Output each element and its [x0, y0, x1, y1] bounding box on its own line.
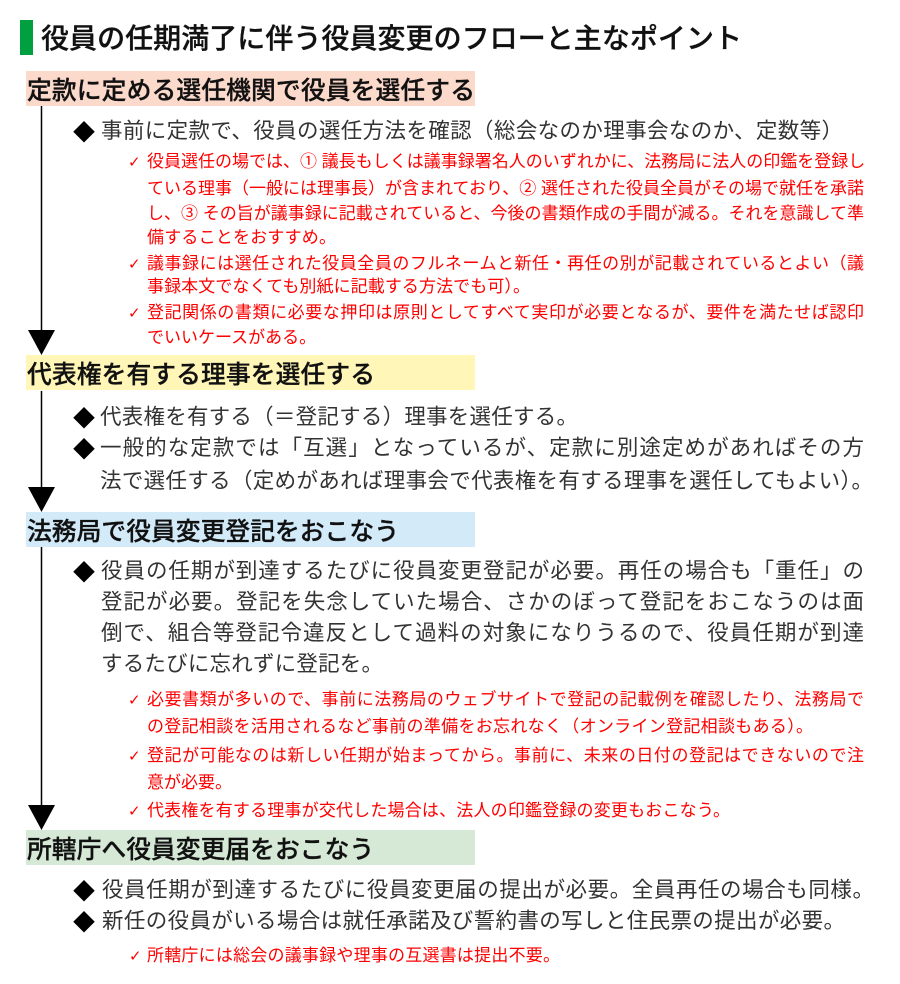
text block: step 4 points: 新任の役員がいる場合は就任承諾及び誓約書の写しと住民票の提出が必要。: [102, 909, 845, 933]
notes: step 1 red details: ✓: [128, 304, 141, 322]
notes: step 1 red details: 議事録には選任された役員全員のフルネームと新任・再任の別が記載されているとよい（議: [147, 254, 864, 272]
notes: step 3 red details: の登記相談を活用されるなど事前の準備をお忘れなく（オンライン登記相談もある）。: [147, 717, 813, 736]
text block: step 4 points: [73, 874, 874, 937]
text block: step 3 point: ◆: [73, 555, 95, 587]
arrow: step 3 to step 4: [28, 547, 55, 830]
notes: step 1 red details: ✓: [128, 152, 141, 170]
arrow: step 1 to step 2: [28, 106, 55, 355]
notes: step 1 red details: ている理事（一般には理事長）が含まれており、② 選任された役員全員がその場で就任を承諾: [147, 178, 864, 198]
title: 役員の任期満了に伴う役員変更のフローと主なポイント: [41, 23, 742, 54]
heading: step 1: 定款に定める選任機関で役員を選任する: [27, 78, 475, 105]
notes: step 1 red details: 登記関係の書類に必要な押印は原則としてすべて実印が必要となるが、要件を満たせば認印: [147, 302, 864, 322]
notes: step 3 red details: ✓: [128, 802, 141, 820]
text block: step 3 point: [73, 555, 864, 676]
heading: step 4: 所轄庁へ役員変更届をおこなう: [27, 837, 374, 864]
notes: step 3 red details: 登記が可能なのは新しい任期が始まってから。事前に、未来の日付の登記はできないので注: [147, 746, 864, 765]
text block: step 2 points: 法で選任する（定めがあれば理事会で代表権を有する理事を選任してもよい）。: [100, 469, 873, 493]
notes: step 3 red details: ✓: [128, 691, 141, 709]
text block: step 2 points: 代表権を有する（＝登記する）理事を選任する。: [100, 405, 578, 429]
notes: step 3 red details: 意が必要。: [147, 773, 232, 792]
notes: step 3 red details: 代表権を有する理事が交代した場合は、法人の印鑑登録の変更もおこなう。: [147, 801, 730, 820]
notes: step 4 red detail: ✓: [129, 947, 142, 965]
text block: step 1 point: ◆: [73, 115, 95, 147]
text block: step 4 points: ◆: [73, 905, 95, 937]
notes: step 3 red details: [128, 690, 864, 820]
notes: step 1 red details: ✓: [128, 254, 141, 272]
notes: step 1 red details: 備することをおすすめ。: [147, 228, 336, 246]
text block: step 4 points: 役員任期が到達するたびに役員変更届の提出が必要。全員再任の場合も同様。: [102, 878, 874, 902]
title accent bar: [20, 20, 33, 55]
notes: step 3 red details: 必要書類が多いので、事前に法務局のウェブサイトで登記の記載例を確認したり、法務局で: [147, 690, 864, 709]
notes: step 3 red details: ✓: [128, 747, 141, 765]
notes: step 1 red details: [128, 152, 865, 346]
notes: step 1 red details: 役員選任の場では、① 議長もしくは議事録署名人のいずれかに、法務局に法人の印鑑を登録し: [147, 152, 865, 170]
notes: step 1 red details: し、③ その旨が議事録に記載されていると、今後の書類作成の手間が減る。それを意識して準: [147, 204, 864, 222]
arrow: step 2 to step 3: [28, 391, 55, 512]
notes: step 1 red details: 事録本文でなくても別紙に記載する方法でも可）。: [147, 276, 530, 296]
heading: step 2: 代表権を有する理事を選任する: [27, 362, 375, 389]
text block: step 4 points: ◆: [73, 874, 95, 906]
text block: step 3 point: するたびに忘れずに登記を。: [101, 652, 383, 676]
text block: step 3 point: 登記が必要。登記を失念していた場合、さかのぼって登記をおこなうのは面: [101, 590, 864, 614]
text block: step 2 points: ◆: [73, 432, 95, 464]
text block: step 2 points: 一般的な定款では「互選」となっているが、定款に別途定めがあればその方: [100, 436, 864, 460]
heading: step 3: [26, 512, 475, 547]
heading: step 3: 法務局で役員変更登記をおこなう: [27, 519, 399, 546]
text block: step 1 point: 事前に定款で、役員の選任方法を確認（総会なのか理事会なのか、定数等）: [101, 119, 843, 143]
heading: step 2: [26, 355, 475, 390]
notes: step 1 red details: でいいケースがある。: [147, 328, 316, 346]
heading: step 4: [26, 830, 475, 865]
notes: step 4 red detail: 所轄庁には総会の議事録や理事の互選書は提出不要。: [147, 946, 560, 965]
text block: step 2 points: ◆: [73, 401, 95, 433]
text block: step 3 point: 役員の任期が到達するたびに役員変更登記が必要。再任の場合も「重任」の: [101, 559, 864, 583]
text block: step 2 points: [73, 401, 873, 493]
text block: step 3 point: 倒で、組合等登記令違反として過料の対象になりうるので、役員任期が到達: [101, 621, 864, 645]
